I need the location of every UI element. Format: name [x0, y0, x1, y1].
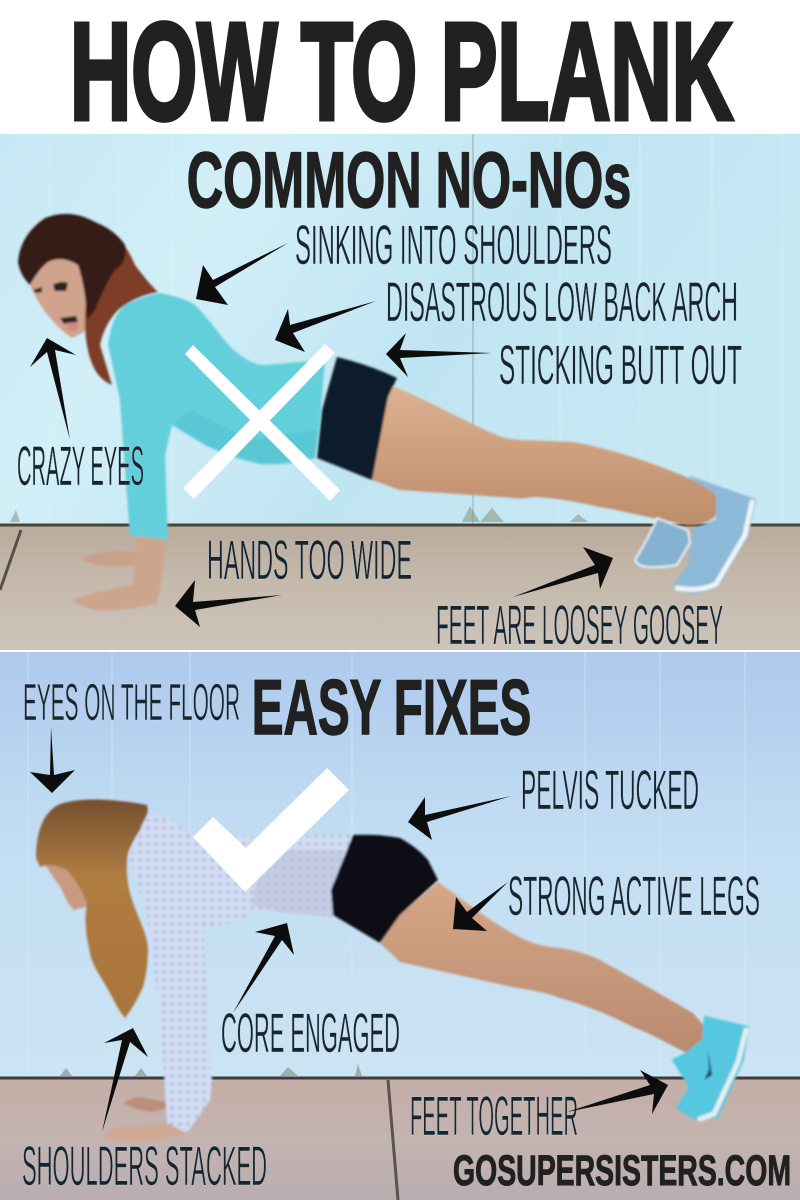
panel: common no-nos: [0, 134, 800, 656]
eyes and mouth: [33, 282, 78, 324]
arrow: sinking into shoulders: [196, 243, 288, 305]
arrow: crazy eyes: [30, 338, 76, 440]
arrow: shoulders stacked: [102, 1028, 148, 1132]
shorts: [331, 835, 438, 943]
panel: easy fixes: CORE ENGAGED: [221, 1001, 400, 1064]
figure: woman in incorrect plank: [18, 214, 755, 610]
panel: common no-nos: HANDS TOO WIDE: [207, 528, 412, 591]
arrow: low back arch: [275, 301, 376, 352]
arrow: sticking butt out: [386, 333, 492, 377]
concrete ground: [0, 1079, 800, 1200]
arrow: eyes on the floor: [30, 727, 75, 793]
check mark: [193, 768, 349, 892]
back shoe: [635, 518, 690, 567]
shirt: [108, 293, 325, 540]
face: [28, 258, 92, 338]
arrow: core engaged: [233, 923, 294, 1013]
arrow: strong active legs: [453, 882, 508, 931]
shorts: [317, 357, 397, 480]
arrow: feet loosey goosey: [513, 547, 613, 597]
near hand: [105, 1123, 187, 1142]
shoe: [673, 1017, 748, 1120]
panel: common no-nos: CRAZY EYES: [17, 434, 144, 497]
leg: [380, 882, 705, 1053]
x mark: [183, 344, 340, 501]
figure: woman in correct plank: [36, 799, 748, 1142]
concrete ground: [0, 526, 800, 650]
face: [42, 855, 92, 910]
far hand: [123, 1097, 170, 1112]
hair: [36, 799, 148, 1018]
front shoe: [673, 477, 755, 594]
wall background: [0, 134, 800, 526]
panel: easy fixes: [0, 652, 800, 1200]
arrow: feet together: [567, 1070, 668, 1114]
near arm and hand: [72, 535, 166, 610]
far hand: [82, 551, 142, 566]
heading: easy fixes: EASY FIXES: [252, 663, 531, 751]
shirt: [130, 815, 352, 1133]
panel: easy fixes: SHOULDERS STACKED: [22, 1134, 267, 1197]
arrow: pelvis tucked: [408, 796, 511, 840]
hair: [85, 228, 158, 385]
leg: [372, 385, 720, 525]
panel: easy fixes: EYES ON THE FLOOR: [23, 674, 240, 732]
hair: dark crown: [18, 214, 126, 320]
wall background: [0, 652, 800, 1078]
arrow: hands too wide: [175, 580, 282, 627]
shoe swoosh: [704, 1050, 712, 1080]
